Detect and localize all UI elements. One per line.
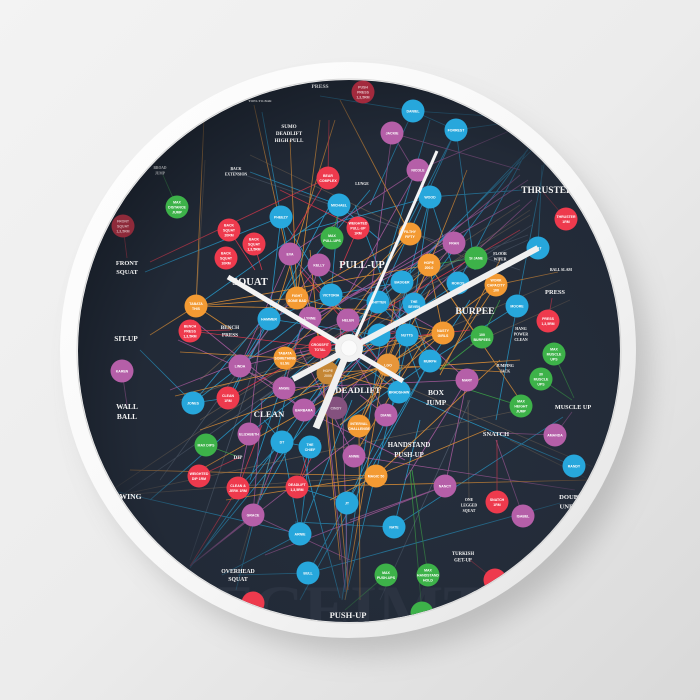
node: bear complex: COMPLEX	[319, 179, 337, 183]
movement labels	[102, 84, 591, 620]
node: daniel	[402, 100, 424, 122]
node: 30 muscle ups: UPS	[537, 382, 545, 386]
node: back squat 1,3,5rm	[242, 232, 266, 256]
node: front squat: 1,3,5RM	[116, 230, 130, 234]
node: jt: JT	[345, 502, 350, 506]
faint watermark lettering: FCEIMT	[210, 571, 490, 647]
node: mary	[456, 368, 478, 392]
node: badger	[390, 270, 414, 294]
hand: minute pointing upper left	[228, 277, 403, 381]
node: nicole	[406, 158, 430, 182]
node: bull	[296, 562, 320, 584]
node: max handstand hold	[416, 564, 440, 586]
node: back squat 20rm	[218, 218, 240, 242]
node: tabata something else: TABATA	[278, 352, 292, 356]
node: annie	[342, 444, 366, 468]
node: push press: PUSH	[358, 86, 368, 90]
node: max height jump: JUMP	[516, 410, 527, 414]
node: si jane	[464, 246, 488, 270]
label: jumping jack: JACK	[500, 370, 510, 374]
label: broad jump: BROAD	[154, 166, 166, 170]
node: work capacity: 100	[493, 288, 499, 292]
node: snatch 1rm	[486, 490, 508, 514]
hand: counterweight lower left	[316, 348, 349, 428]
hand: hub cap	[341, 340, 357, 356]
node: 100 burpees	[470, 326, 494, 348]
node: 30 muscle ups: 30	[539, 372, 543, 376]
node: weighted pull-up: WEIGHTED	[349, 222, 367, 226]
node: nancy	[434, 474, 456, 498]
node: helen: HELEN	[342, 318, 354, 322]
node: weighted dip 1rm: DIP 1RM	[192, 477, 206, 481]
node: work capacity: CAPACITY	[487, 284, 505, 288]
node: max dips: MAX DIPS	[198, 444, 215, 448]
node: rokos: ROKOS	[452, 282, 465, 286]
clock face	[77, 79, 621, 647]
node: fran: FRAN	[449, 242, 459, 246]
label: box jump: JUMP	[426, 398, 447, 407]
node: diane	[374, 404, 398, 426]
node: back squat 1,3,5rm: SQUAT	[248, 242, 261, 246]
label: squat: SQUAT	[232, 277, 268, 288]
node: fight gone bad: FIGHT	[292, 294, 302, 298]
label: sumo deadlift high pull: DEADLIFT	[276, 131, 303, 137]
node: max muscle ups: UPS	[550, 358, 558, 362]
label: push-up: PUSH-UP	[330, 610, 366, 620]
node: nancy: NANCY	[439, 484, 452, 488]
label: snatch: SNATCH	[483, 431, 509, 438]
node: nate: NATE	[389, 526, 399, 530]
node: interval challenge: INTERVAL	[350, 422, 368, 426]
label: handstand push-up: PUSH-UP	[394, 452, 424, 459]
label: overhead squat: SQUAT	[228, 577, 248, 583]
node: wood: WOOD	[424, 196, 436, 200]
node: max height jump: MAX	[517, 400, 525, 404]
node: jones: JONES	[187, 402, 200, 406]
node: bear complex: BEAR	[323, 174, 333, 178]
label: back extension: EXTENSION	[225, 172, 247, 176]
label: dip: DIP	[234, 455, 243, 461]
label: burpee: BURPEE	[455, 306, 495, 317]
node: filthy fifty: FILTHY	[404, 230, 416, 234]
node: eva	[278, 242, 302, 266]
node: michael	[328, 194, 350, 216]
node: nicole: NICOLE	[411, 168, 425, 172]
node: press 1,3,5rm: 1,3,5RM	[541, 322, 555, 326]
node: snatch 1rm: 1RM	[493, 503, 501, 507]
node: back squat 10rm: BACK	[221, 252, 231, 256]
node: elizabeth	[238, 422, 260, 446]
node: tabata this: TABATA	[189, 302, 203, 306]
node: isabel	[512, 504, 534, 528]
node: nate	[382, 516, 406, 538]
label: sit-up: SIT-UP	[114, 334, 138, 343]
node: nutts	[396, 324, 418, 346]
node: fight gone bad: GONE BAD	[288, 299, 307, 303]
label: sumo deadlift high pull: SUMO	[281, 124, 297, 130]
node: push press: 1,3,5RM	[356, 96, 370, 100]
node: hammer	[258, 308, 280, 330]
node: nasty girls	[432, 322, 454, 344]
node: whitten	[366, 290, 390, 314]
node: front squat: SQUAT	[117, 224, 130, 228]
label: wall ball: BALL	[117, 412, 137, 421]
hand: pointing right	[293, 248, 538, 379]
node: max push-ups: MAX	[382, 571, 390, 575]
node: thruster 1rm	[554, 208, 578, 230]
node: angie: ANGIE	[278, 386, 290, 390]
node: bradshaw: BRADSHAW	[389, 390, 410, 394]
node: tabata something else: ELSE	[280, 362, 290, 366]
node: work capacity: WORK	[490, 278, 502, 282]
node: deadlift 1,3,5rm: DEADLIFT	[288, 483, 306, 487]
node: fight gone bad	[286, 286, 308, 310]
node: dt: DT	[280, 440, 285, 444]
node: kelly: KELLY	[313, 264, 325, 268]
node: nasty girls: NASTY	[437, 329, 449, 333]
label: ball slam: BALL SLAM	[550, 268, 572, 272]
node: the seven: THE	[410, 300, 418, 304]
node: magic 50	[364, 464, 388, 488]
node: whitten: WHITTEN	[370, 300, 386, 304]
label: one legged squat: LEGGED	[461, 504, 477, 508]
clock rim inner bevel	[77, 79, 621, 623]
node: push press: PRESS	[357, 90, 370, 94]
node: murph: MURPH	[424, 360, 437, 364]
node: interval challenge: CHALLENGE	[348, 427, 371, 431]
node: crossfit total: CROSSFIT	[311, 343, 329, 347]
node: weighted dip 1rm	[188, 464, 210, 488]
label: press right: PRESS	[545, 289, 565, 296]
node: max pull-ups: MAX	[328, 234, 336, 238]
node: victoria: VICTORIA	[323, 294, 340, 298]
node: hope 200: 200.0	[425, 266, 433, 270]
node: 100 burpees: 100	[479, 333, 485, 337]
node: forrest	[444, 118, 468, 142]
node: weighted pull-up: PULL-UP	[350, 226, 366, 230]
node: crossfit total: TOTAL	[314, 348, 327, 352]
node: tabata this: THIS	[192, 307, 201, 311]
node: back squat 20rm: BACK	[224, 224, 234, 228]
node: front squat: FRONT	[117, 220, 129, 224]
node: clean and jerk 1rm: CLEAN &	[230, 484, 246, 488]
node: eva: EVA	[287, 252, 294, 256]
node: the seven: SEVEN	[408, 305, 420, 309]
node: the chief: THE	[306, 443, 314, 447]
node: tabata this	[184, 294, 208, 318]
node: the chief: CHIEF	[305, 448, 316, 452]
node: kelly	[308, 254, 330, 276]
node: red lower right clipped	[484, 568, 506, 592]
node: filthy fifty: FIFTY	[405, 235, 416, 239]
node: clean 1rm	[216, 386, 240, 410]
node: max handstand hold: HANDSTAND	[417, 574, 439, 578]
node: grace	[242, 504, 264, 526]
node: back squat 20rm: SQUAT	[223, 228, 236, 232]
node: max distance jump: JUMP	[172, 210, 183, 214]
node: nutts: NUTTS	[401, 334, 413, 338]
node: clean and jerk 1rm	[226, 476, 250, 500]
node: red bottom clipped	[242, 592, 264, 614]
node: weighted pull-up: 1RM	[354, 232, 362, 236]
node: bench press: PRESS	[184, 330, 197, 334]
node: magic 50: MAGIC 50	[368, 474, 384, 478]
node: green bottom clipped	[410, 602, 434, 624]
node: jones	[182, 392, 204, 414]
node: clean 1rm: 1RM	[224, 399, 232, 403]
node: work capacity	[484, 274, 508, 296]
node: weighted pull-up	[346, 216, 370, 240]
node: nasty girls: GIRLS	[438, 334, 449, 338]
node: blue top right: KAT	[535, 246, 542, 250]
label: bench press: BENCH	[221, 325, 239, 331]
node: hope 200	[418, 254, 440, 276]
node: the seven	[402, 292, 426, 316]
label: jumping jack: JUMPING	[496, 364, 514, 368]
label: broad jump: JUMP	[155, 172, 166, 176]
node: isabel: ISABEL	[517, 514, 530, 518]
node: barbara: BARBARA	[295, 408, 313, 412]
label: muscle up: MUSCLE UP	[555, 404, 591, 411]
node: fran	[442, 232, 466, 254]
node: 100 burpees: BURPEES	[474, 338, 491, 342]
label: floor wiper: FLOOR	[493, 252, 507, 256]
node: max dips	[194, 434, 218, 456]
node: lgo	[376, 354, 400, 376]
node: diane: DIANE	[381, 414, 392, 418]
node: max pull-ups: PULL-UPS	[323, 239, 341, 243]
node: crossfit total	[308, 336, 332, 358]
node: hammer: HAMMER	[261, 318, 277, 322]
node: back squat 1,3,5rm: 1,3,5RM	[247, 248, 261, 252]
node: forrest: FORREST	[448, 128, 465, 132]
label: one legged squat: SQUAT	[463, 509, 476, 513]
label: hang power clean: CLEAN	[514, 338, 528, 342]
node: press 1,3,5rm: PRESS	[542, 317, 554, 321]
node: blue near hub	[368, 324, 390, 346]
node: amanda: AMANDA	[547, 434, 563, 438]
node: thruster 1rm: THRUSTER	[556, 215, 576, 219]
node: cindy: CINDY	[331, 406, 342, 410]
node: linda	[228, 354, 252, 378]
label: lunge: LUNGE	[355, 182, 369, 186]
node: randy	[562, 454, 586, 478]
clock rim	[60, 62, 636, 638]
node: victoria	[320, 284, 342, 306]
label: double unders: UNDERS	[559, 504, 587, 510]
node: karen: KAREN	[116, 370, 129, 374]
node: max push-ups: PUSH-UPS	[377, 576, 396, 580]
node: dt	[270, 430, 294, 454]
node: jackie	[380, 122, 404, 144]
node: hope 2000	[316, 362, 340, 384]
node: snatch 1rm: SNATCH	[490, 498, 504, 502]
node: front squat	[112, 214, 134, 238]
label: handstand push-up: HANDSTAND	[388, 442, 430, 449]
clock drop shadow	[80, 86, 648, 654]
label: deadlift: DEADLIFT	[335, 385, 381, 395]
node: 30 muscle ups: MUSCLE	[534, 378, 549, 382]
node: deadlift 1,3,5rm	[286, 476, 308, 498]
node: elizabeth: ELIZABETH	[239, 432, 259, 436]
label: one legged squat: ONE	[465, 498, 473, 502]
node: max distance jump	[166, 196, 188, 218]
node: si jane: SI JANE	[469, 256, 483, 260]
node: bradshaw	[388, 380, 410, 404]
node: michael: MICHAEL	[331, 204, 348, 208]
label: thruster: THRUSTER	[521, 186, 573, 196]
clock hands	[228, 151, 538, 428]
node: max muscle ups: MAX	[550, 348, 558, 352]
node: pheezy	[270, 206, 292, 228]
label: turkish get-up: TURKISH	[452, 552, 474, 557]
label: front squat: SQUAT	[116, 269, 139, 276]
label: floor wiper: WIPER	[494, 258, 507, 262]
node: filthy fifty	[398, 222, 422, 246]
node: linda: LINDA	[235, 364, 246, 368]
label: press top: PRESS	[311, 84, 329, 90]
node: lynne: LYNNE	[304, 316, 316, 320]
label: turkish get-up: GET-UP	[454, 558, 472, 564]
node: bull: BULL	[303, 572, 314, 576]
node: max handstand hold: MAX	[424, 568, 432, 572]
node: max muscle ups	[542, 342, 566, 366]
node: bench press: BENCH	[184, 324, 196, 328]
node: cindy	[324, 396, 348, 420]
node: weighted dip 1rm: WEIGHTED	[190, 472, 208, 476]
node: max distance jump: MAX	[173, 200, 181, 204]
node: thruster 1rm: 1RM	[562, 220, 570, 224]
node: max pull-ups	[320, 226, 344, 250]
node: hope 2000: 2000	[324, 374, 332, 378]
label: hang power clean: POWER	[514, 332, 528, 336]
node: hope 2000: HOPE	[323, 369, 333, 373]
node: annie: ANNIE	[349, 454, 360, 458]
label: wall ball: WALL	[116, 402, 138, 411]
node: clean 1rm: CLEAN	[222, 394, 234, 398]
node: angie	[272, 376, 296, 400]
node: max muscle ups: MUSCLE	[547, 352, 562, 356]
node: blue top right	[526, 236, 550, 260]
node: jt	[336, 492, 358, 514]
label: double unders: DOUBLE	[559, 494, 587, 501]
node: grace: GRACE	[247, 514, 260, 518]
node: mary: MARY	[462, 378, 473, 382]
node: hope 200: HOPE	[424, 261, 434, 265]
node: badger: BADGER	[394, 280, 410, 284]
network connections	[115, 96, 600, 613]
node: tabata something else	[274, 346, 296, 370]
node: pheezy: PHEEZY	[274, 216, 289, 220]
node: randy: RANDY	[568, 464, 581, 468]
node: lgo: LGO	[384, 364, 392, 368]
node: 30 muscle ups	[530, 368, 552, 390]
node: lynne	[298, 306, 322, 330]
node: karen	[110, 360, 134, 382]
label: hang power clean: HANG	[515, 327, 527, 331]
node: push press	[352, 80, 374, 104]
label: bench press: PRESS	[222, 332, 238, 338]
label: overhead squat: OVERHEAD	[221, 569, 255, 575]
node: back squat 10rm: 10RM	[221, 262, 231, 266]
node: wood	[418, 186, 442, 208]
node: barbara	[292, 398, 316, 422]
node: bear complex	[316, 166, 340, 190]
node: back squat 1,3,5rm: BACK	[249, 238, 259, 242]
label: toes-to-bar: TOES-TO-BAR	[248, 99, 272, 103]
node: back squat 20rm: 20RM	[224, 234, 234, 238]
node: back squat 10rm: SQUAT	[220, 256, 233, 260]
node: max handstand hold: HOLD	[423, 578, 433, 582]
node: arnie	[288, 522, 312, 546]
node: bench press: 1,3,5RM	[183, 334, 197, 338]
node: max distance jump: DISTANCE	[168, 206, 186, 210]
label: clean: CLEAN	[254, 409, 285, 419]
label: swing: KB SWING	[102, 492, 142, 501]
label: back extension: BACK	[231, 167, 241, 171]
node: max height jump: HEIGHT	[514, 404, 528, 408]
nodes	[110, 80, 586, 624]
node: moore	[506, 294, 528, 318]
node: rokos	[446, 272, 470, 294]
node: max push-ups	[374, 564, 398, 586]
node: jackie: JACKIE	[386, 132, 399, 136]
node: amanda	[544, 424, 566, 446]
node: the chief	[298, 436, 322, 458]
node: murph	[418, 350, 442, 372]
hand: hub	[335, 334, 363, 362]
node: back squat 10rm	[214, 246, 238, 270]
node: daniel: DANIEL	[406, 110, 420, 114]
node: helen	[336, 308, 360, 332]
node: bench press	[178, 320, 202, 342]
node: arnie: ARNIE	[295, 532, 306, 536]
label: sumo deadlift high pull: HIGH PULL	[275, 138, 304, 144]
node: press 1,3,5rm	[536, 310, 560, 332]
label: box jump: BOX	[428, 388, 444, 397]
node: interval challenge	[348, 414, 371, 438]
node: max height jump	[510, 394, 532, 418]
label: front squat: FRONT	[116, 260, 138, 267]
node: moore: MOORE	[510, 304, 524, 308]
node: tabata something else: SOMETHING	[274, 356, 296, 360]
node: clean and jerk 1rm: JERK 1RM	[229, 489, 247, 493]
node: deadlift 1,3,5rm: 1,3,5RM	[290, 488, 304, 492]
hand: long pointing up right	[316, 151, 437, 428]
label: pull-up: PULL-UP	[339, 260, 385, 271]
